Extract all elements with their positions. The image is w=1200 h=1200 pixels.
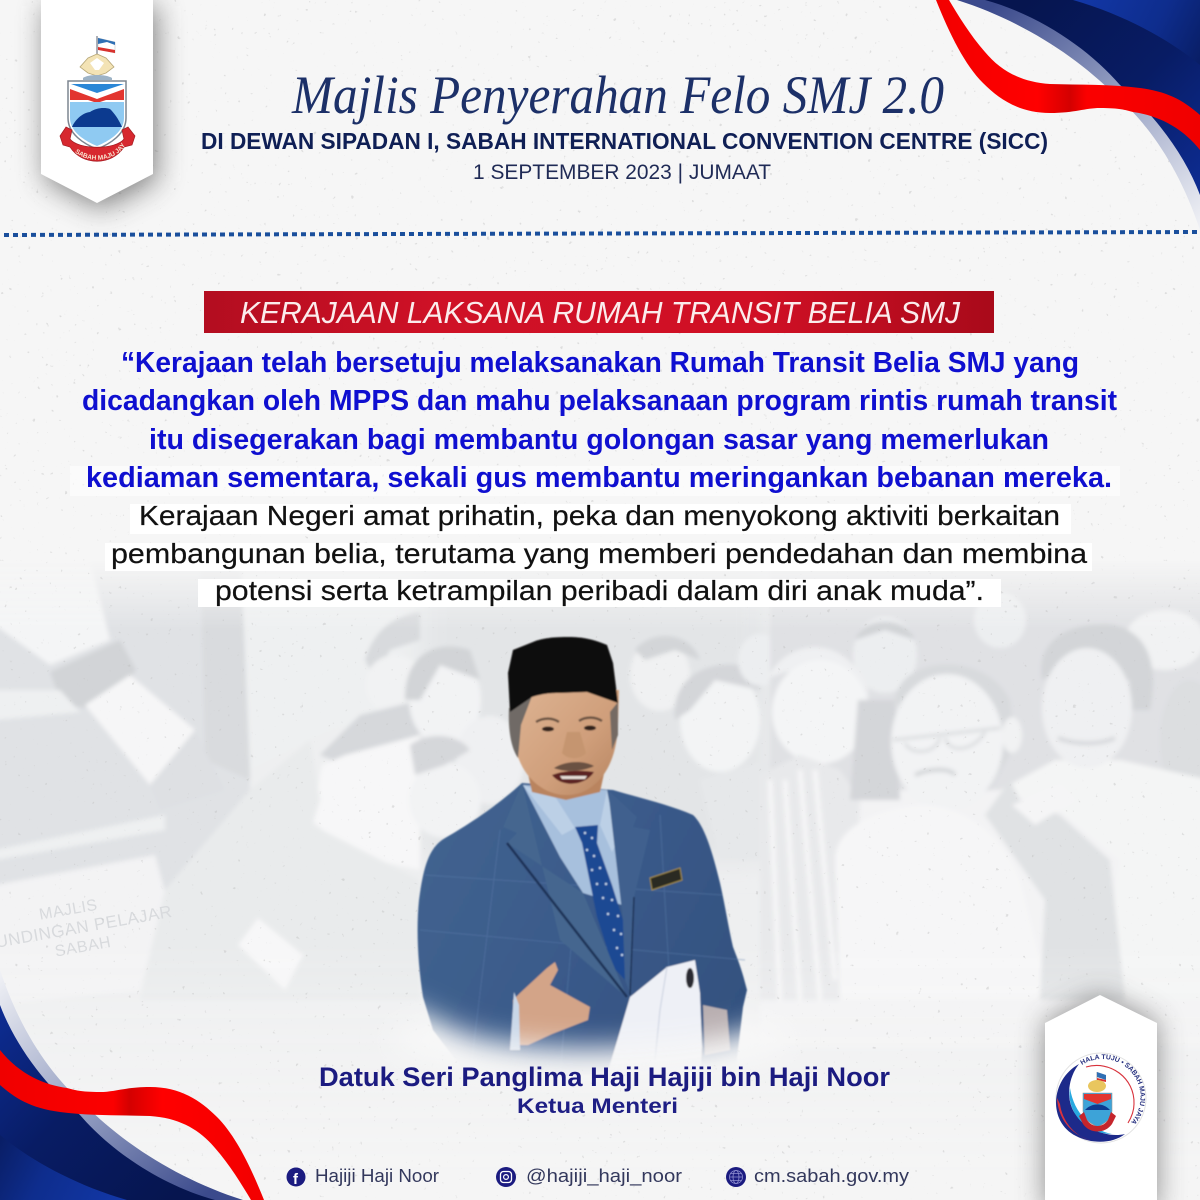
blue quote lines: kediaman sementara, sekali gus membantu meringankan bebanan mereka. — [86, 462, 1112, 494]
corner waves bottom left — [0, 970, 264, 1200]
icon: Hala Tuju Sabah Maju Jaya badge: HALA TUJU • SABAH MAJU JAYA — [1080, 1054, 1146, 1124]
venue line: DI DEWAN SIPADAN I, SABAH INTERNATIONAL CONVENTION CENTRE (SICC) — [201, 128, 1048, 154]
black quote lines: potensi serta ketrampilan peribadi dalam diri anak muda”. — [215, 575, 984, 606]
title block — [201, 65, 1048, 184]
right crowd: man at far right — [985, 624, 1200, 1000]
white papers — [607, 960, 702, 1075]
highlight strips behind black text — [70, 466, 1120, 607]
placard lettering: SABAH — [54, 934, 112, 961]
faded crowd photo background — [0, 584, 1200, 1000]
suit jacket — [418, 783, 747, 1075]
left dark wall and arm — [0, 600, 250, 956]
icon: Hala Tuju Sabah Maju Jaya badge — [1056, 1052, 1146, 1144]
blue quote lines: dicadangkan oleh MPPS dan mahu pelaksanaan program rintis rumah transit — [82, 385, 1117, 417]
neck and face — [528, 774, 604, 801]
black quote lines: pembangunan belia, terutama yang memberi pendedahan dan membina — [111, 538, 1087, 569]
corner waves top right — [936, 0, 1200, 230]
white glow beneath portrait — [390, 1006, 790, 1074]
gesturing hand — [513, 962, 590, 1045]
name badge — [650, 868, 682, 890]
instagram link: @hajiji_haji_noor — [526, 1166, 682, 1187]
black quote lines: Kerajaan Negeri amat prihatin, peka dan menyokong aktiviti berkaitan — [139, 500, 1060, 531]
facebook link: Hajiji Haji Noor — [315, 1166, 439, 1186]
right crowd: lower clothing tone — [760, 790, 1200, 1050]
speaker name: Datuk Seri Panglima Haji Hajiji bin Haji Noor — [319, 1062, 890, 1092]
blue quote lines — [82, 347, 1117, 494]
centre crowd faces — [404, 636, 760, 838]
placard lettering: MAJLIS — [38, 897, 99, 924]
date line: 1 SEPTEMBER 2023 | JUMAAT — [473, 160, 771, 184]
right crowd: man with glasses — [836, 674, 1022, 998]
portrait of the Chief Minister — [418, 637, 747, 1075]
title: script heading: Majlis Penyerahan Felo SMJ 2.0 — [291, 65, 944, 125]
social links row — [286, 1166, 909, 1188]
website link: cm.sabah.gov.my — [754, 1166, 909, 1186]
section heading bar: KERAJAAN LAKSANA RUMAH TRANSIT BELIA SMJ — [240, 295, 960, 330]
icon: Sabah state crest — [60, 36, 136, 162]
shirt — [523, 785, 622, 905]
facebook link: f — [293, 1171, 299, 1188]
blue quote lines: “Kerajaan telah bersetuju melaksanakan Rumah Transit Belia SMJ yang — [121, 347, 1079, 379]
right crowd: back row — [770, 540, 1200, 800]
right crowd: woman with cap — [760, 647, 868, 1000]
black quote lines — [111, 500, 1087, 606]
tilted face left of centre — [172, 607, 761, 966]
speaker title: Ketua Menteri — [517, 1094, 678, 1118]
top left banner with state crest — [26, 0, 176, 224]
jacket lapels — [536, 854, 624, 991]
bottom right banner with logo — [1026, 981, 1176, 1200]
necktie — [575, 825, 625, 980]
blue quote lines: itu disegerakan bagi membantu golongan sasar yang memerlukan — [149, 424, 1049, 456]
quote text block — [70, 347, 1120, 607]
songkok cap — [508, 637, 618, 712]
